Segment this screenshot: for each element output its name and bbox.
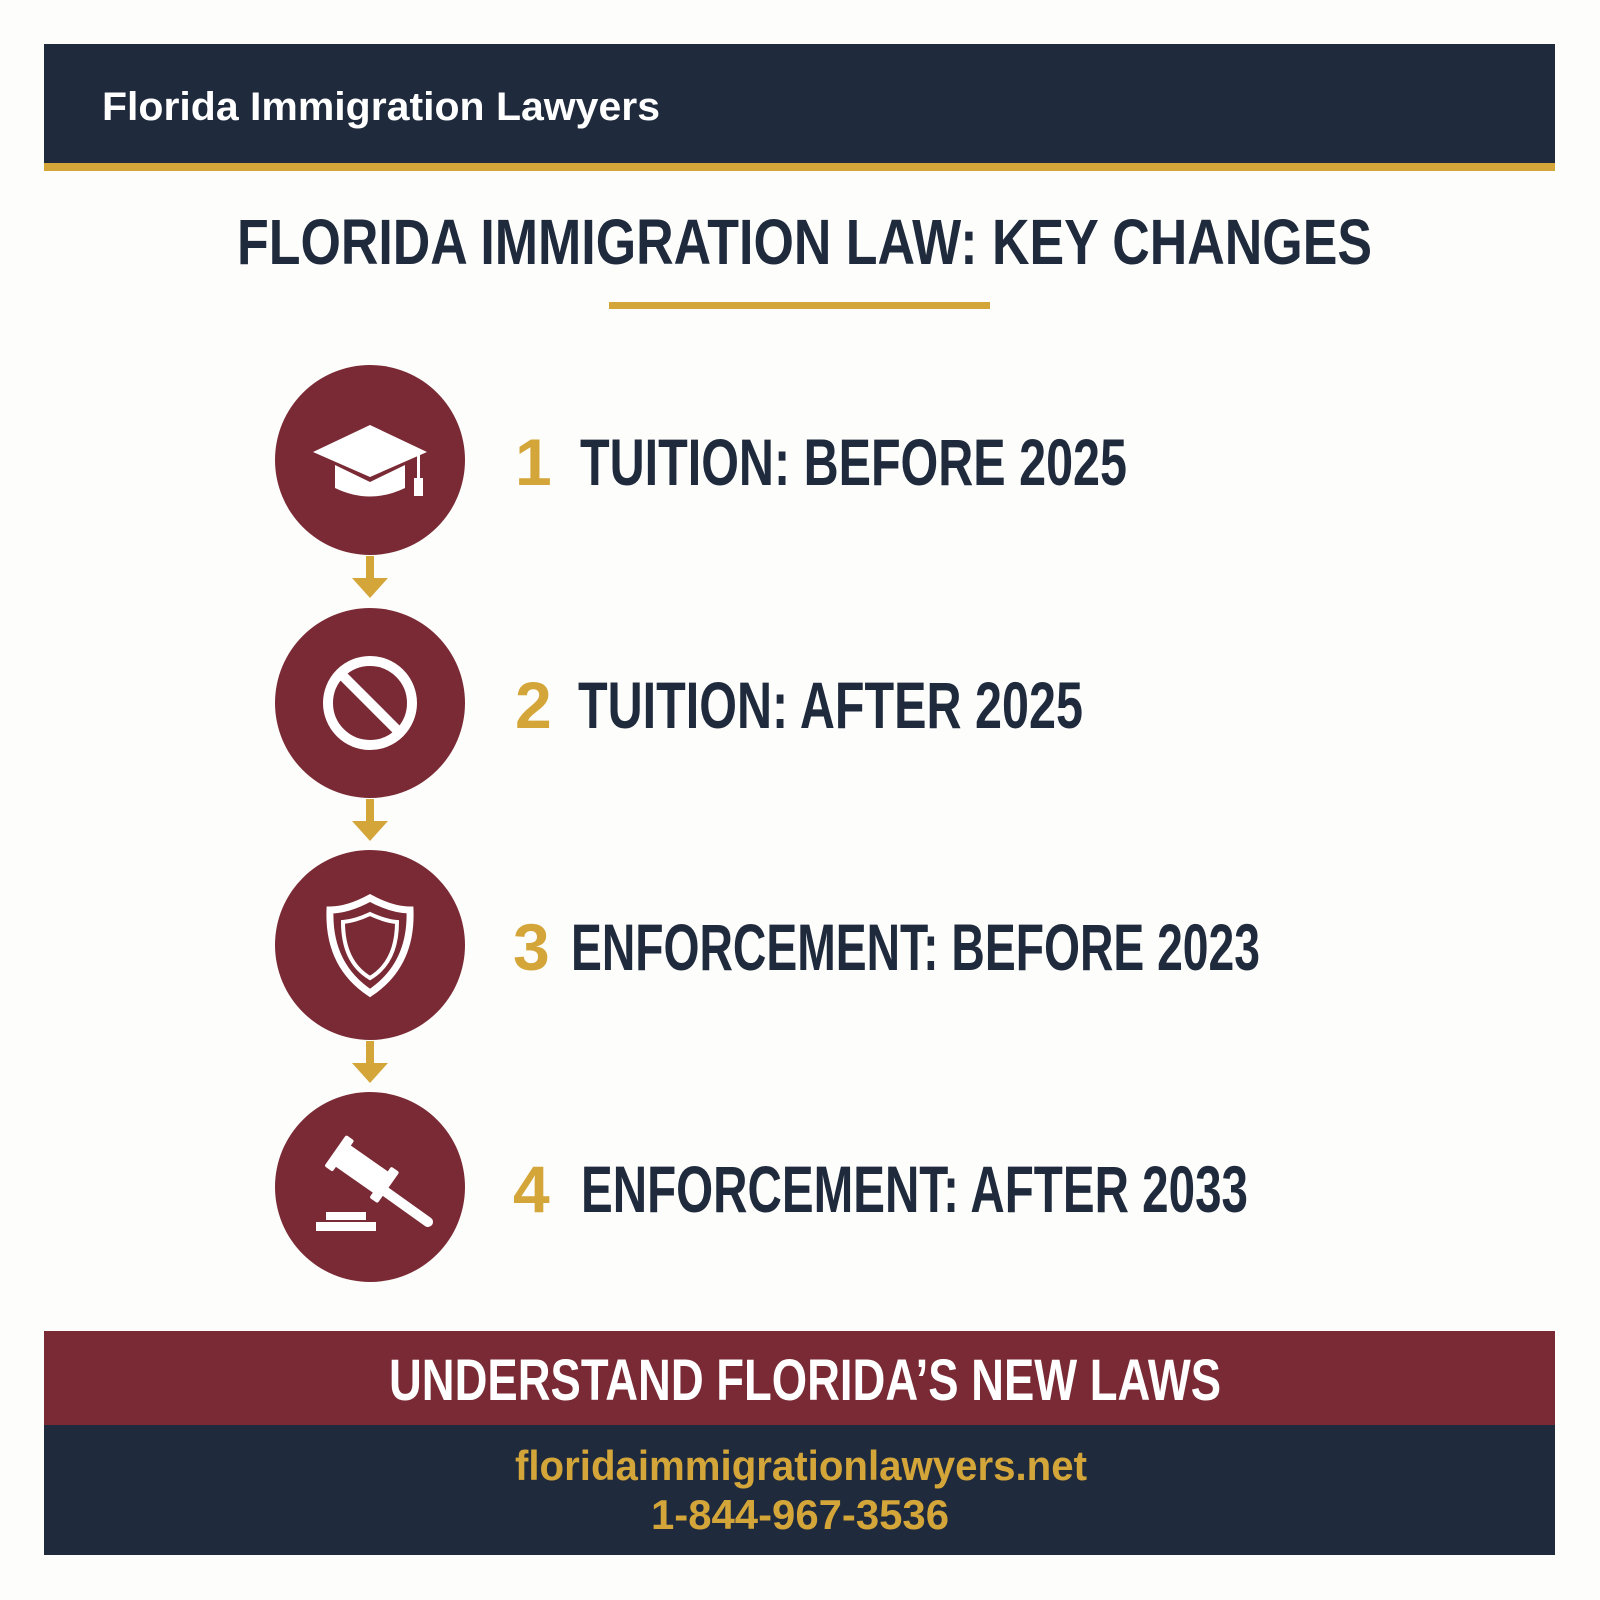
header bar [44,44,1555,171]
number 1: 1 [515,425,552,499]
number 4: 4 [513,1152,550,1226]
icon: prohibited sign [275,608,465,798]
arrow 3 [352,1041,388,1083]
label 3: ENFORCEMENT: BEFORE 2023 [571,910,1260,984]
icon: shield [275,850,465,1040]
step 1 [275,365,1127,555]
step 3 [275,850,1260,1040]
label 4: ENFORCEMENT: AFTER 2033 [581,1152,1248,1226]
call-to-action banner [44,1331,1555,1426]
title underline [609,302,990,309]
icon: gavel [275,1092,465,1282]
number 2: 2 [515,668,552,742]
label 1: TUITION: BEFORE 2025 [580,425,1127,499]
website: floridaimmigrationlawyers.net [515,1442,1087,1489]
header brand text: Florida Immigration Lawyers [102,85,660,129]
call-to-action banner: UNDERSTAND FLORIDA’S NEW LAWS [389,1348,1221,1413]
label 2: TUITION: AFTER 2025 [578,668,1083,742]
step 2 [275,608,1083,798]
footer contact [44,1425,1555,1555]
icon: graduation cap [275,365,465,555]
phone: 1-844-967-3536 [651,1491,949,1538]
number 3: 3 [513,910,550,984]
arrow 1 [352,556,388,598]
step 4 [275,1092,1248,1282]
arrow 2 [352,799,388,841]
title: FLORIDA IMMIGRATION LAW: KEY CHANGES [237,206,1372,278]
